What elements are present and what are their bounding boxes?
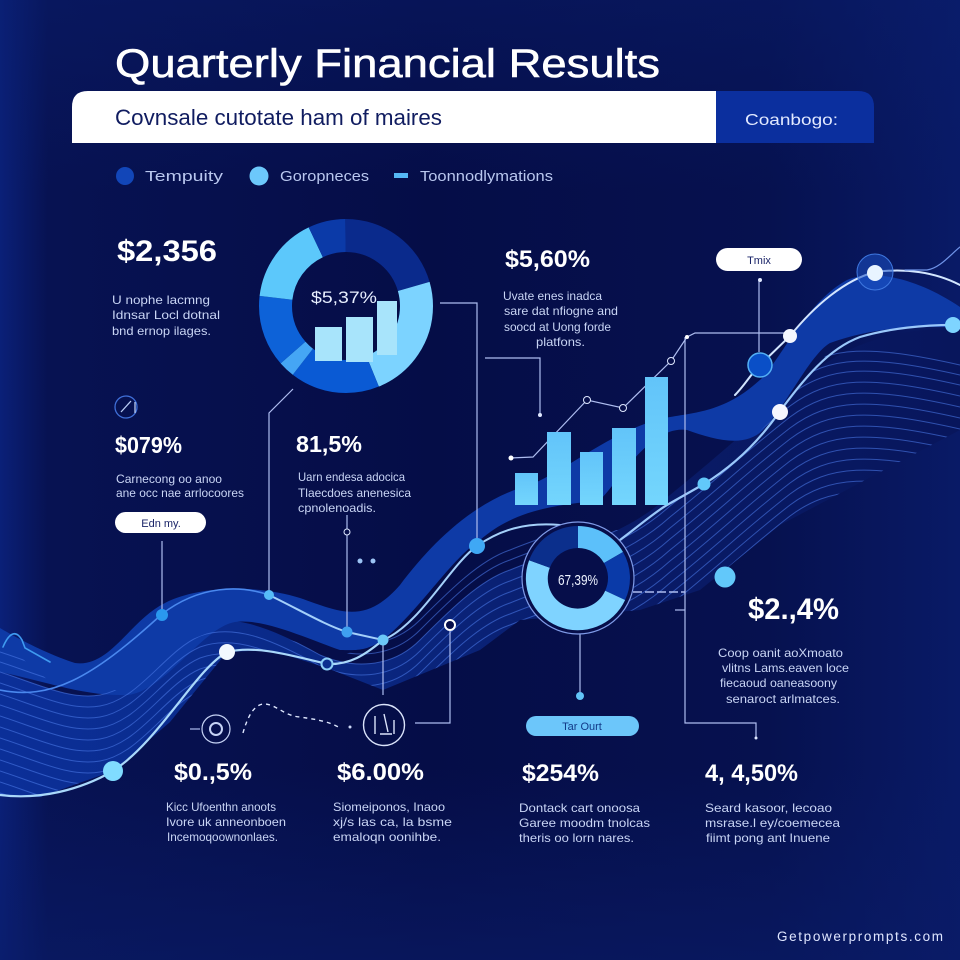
stat: bottom 4: 4, 4,50% <box>705 760 798 787</box>
stat: bottom 3 <box>519 760 650 845</box>
donut chart: main <box>276 236 416 376</box>
stat: bottom 3: theris oo lorn nares. <box>519 831 634 845</box>
header bar: Coanbogo: <box>745 112 838 129</box>
stat: bottom 1 <box>166 759 286 844</box>
legend: Toonnodlymations <box>420 168 553 185</box>
stat: upper center: soocd at Uong forde <box>504 320 611 334</box>
thin wave lines <box>0 351 960 817</box>
stat: bottom 1: Incemoqoownonlaes. <box>167 830 278 844</box>
stat: bottom 2: $6.00% <box>337 759 424 786</box>
donut chart: secondary <box>522 522 634 634</box>
header bar: Covnsale cutotate ham of maires <box>115 105 442 130</box>
trend lines <box>0 247 960 796</box>
stat: upper center: sare dat nfiogne and <box>504 304 618 318</box>
stat: left middle: ane occ nae arrlocoores <box>116 486 244 500</box>
stat: bottom 4: fiimt pong ant Inuene <box>706 831 830 845</box>
stat: center middle: Uarn endesa adocica <box>298 470 405 484</box>
pill: top left <box>115 512 206 533</box>
stat: right: senaroct arlmatces. <box>726 692 840 706</box>
stat: right <box>718 593 849 706</box>
stat: bottom 1: Kicc Ufoenthn anoots <box>166 800 276 814</box>
donut chart: secondary: 67,39% <box>558 572 598 589</box>
stat: bottom 3: Dontack cart onoosa <box>519 801 640 815</box>
data nodes <box>103 254 960 781</box>
legend: Tempuity <box>145 168 224 185</box>
stat: left middle: $079% <box>115 432 182 458</box>
stat: revenue: Idnsar Locl dotnal <box>112 308 220 322</box>
stat: center middle <box>296 431 411 515</box>
icon: emblem <box>202 715 230 743</box>
watermark: Getpowerprompts.com <box>777 929 943 944</box>
pill: top left: Edn my. <box>141 518 181 530</box>
stat: right: $2.,4% <box>748 593 839 626</box>
pill: top right: Tmix <box>747 255 771 267</box>
stat: left middle: Carnecong oo anoo <box>116 472 222 486</box>
stat: bottom 4 <box>705 760 840 845</box>
stat: bottom 2: Siomeiponos, Inaoo <box>333 800 445 814</box>
stat: right: Coop oanit aoXmoato <box>718 646 843 660</box>
pill: lower: Tar Ourt <box>562 721 602 733</box>
stat: center middle: 81,5% <box>296 431 362 457</box>
donut chart: main: $5,37% <box>311 288 377 307</box>
stat: right: vlitns Lams.eaven loce <box>722 661 849 675</box>
pill: lower <box>526 716 639 736</box>
connector lines <box>162 280 790 738</box>
icon: gauge <box>115 396 137 418</box>
stat: revenue: bnd ernop ilages. <box>112 324 211 338</box>
stat: right: fiecaoud oaneasoony <box>720 676 837 690</box>
stat: revenue: $2,356 <box>117 235 217 268</box>
bar chart <box>515 377 668 505</box>
pill: top right <box>716 248 802 271</box>
stat: revenue: U nophe lacmng <box>112 293 210 307</box>
stat: center middle: cpnolenoadis. <box>298 501 376 515</box>
wave bands <box>0 275 960 797</box>
stat: upper center: Uvate enes inadca <box>503 289 602 303</box>
stat: bottom 2: xj/s las ca, la bsme <box>333 815 452 829</box>
stat: revenue <box>112 235 220 338</box>
stat: bottom 1: $0.,5% <box>174 759 252 786</box>
stat: bottom 4: msrase.l ey/coemecea <box>705 816 840 830</box>
stat: center middle: Tlaecdoes anenesica <box>298 486 411 500</box>
stat: bottom 3: $254% <box>522 760 599 787</box>
legend <box>116 166 553 186</box>
legend: Goropneces <box>280 168 369 185</box>
chart markers <box>508 278 762 460</box>
stat: upper center: $5,60% <box>505 246 590 273</box>
stat: left middle <box>115 432 244 500</box>
icon: bars <box>364 704 404 746</box>
stat: bottom 2: emaloqn oonihbe. <box>333 830 441 844</box>
stat: bottom 1: Ivore uk anneonboen <box>166 815 286 829</box>
stat: bottom 4: Seard kasoor, lecoao <box>705 801 832 815</box>
stat: bottom 2 <box>333 759 452 844</box>
stat: upper center <box>503 246 618 349</box>
title: Quarterly Financial Results <box>115 42 660 86</box>
stat: bottom 3: Garee moodm tnolcas <box>519 816 650 830</box>
stat: upper center: platfons. <box>536 335 585 349</box>
header bar <box>72 91 874 143</box>
